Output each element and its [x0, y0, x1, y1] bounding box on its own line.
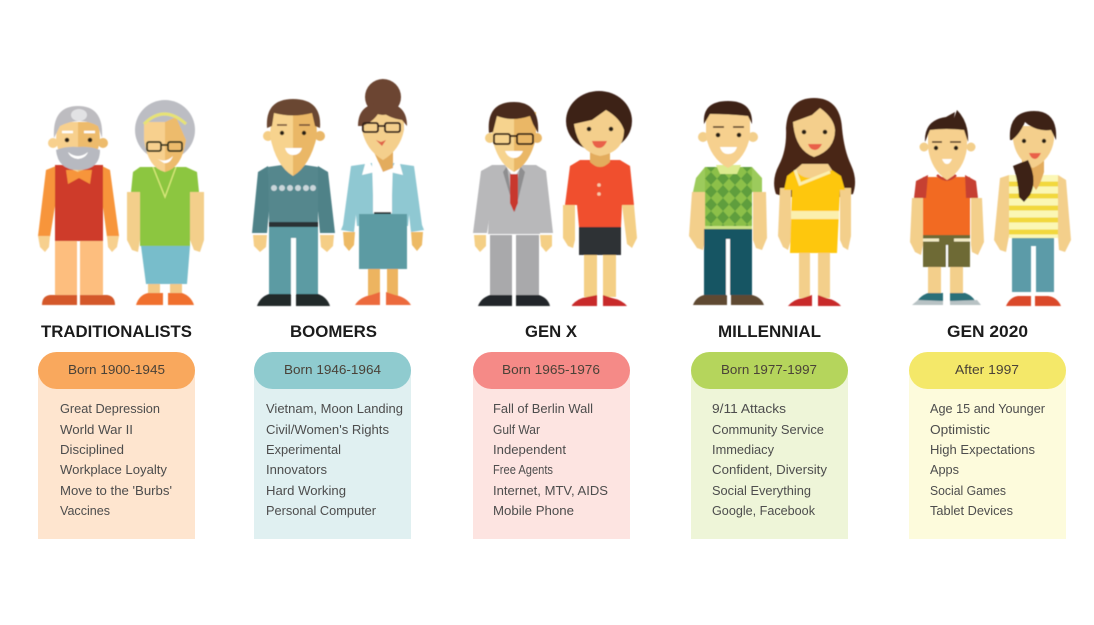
woman in blue jacket — [341, 79, 424, 305]
list: Workplace Loyalty — [60, 463, 168, 477]
man in grey suit — [473, 102, 553, 306]
heading: GEN X — [525, 322, 578, 341]
list: Confident, Diversity — [712, 463, 828, 477]
date pill — [691, 352, 848, 389]
heading: GEN 2020 — [947, 322, 1028, 341]
list: Age 15 and Younger — [930, 402, 1045, 416]
list: 9/11 Attacks — [712, 402, 786, 416]
pill label: Born 1900-1945 — [68, 363, 165, 377]
list: Internet, MTV, AIDS — [493, 484, 608, 498]
grandfather — [38, 106, 119, 305]
list: Fall of Berlin Wall — [493, 402, 593, 416]
column: traditionalists — [38, 322, 195, 539]
list — [493, 402, 608, 518]
list: High Expectations — [930, 443, 1035, 457]
figures: gen 2020 — [910, 110, 1071, 306]
list: Optimistic — [930, 423, 990, 437]
panel body — [473, 370, 630, 539]
figures: gen x — [473, 91, 637, 306]
woman in yellow dress — [774, 98, 855, 306]
list: Free Agents — [493, 463, 553, 477]
column: gen 2020 — [909, 322, 1066, 539]
date pill — [909, 352, 1066, 389]
panel body — [909, 370, 1066, 539]
pill label: Born 1946-1964 — [284, 363, 381, 377]
list: Gulf War — [493, 423, 540, 437]
list: Tablet Devices — [930, 504, 1013, 518]
list: Personal Computer — [266, 504, 376, 518]
figures: millennial — [689, 98, 855, 306]
list: Move to the 'Burbs' — [60, 484, 172, 498]
figures: boomers — [252, 79, 424, 306]
man in sweater — [252, 99, 335, 306]
heading: BOOMERS — [290, 322, 377, 341]
list: Independent — [493, 443, 567, 457]
list: Immediacy — [712, 443, 775, 457]
heading: TRADITIONALISTS — [41, 322, 192, 341]
man in argyle vest — [689, 101, 767, 305]
list: Vaccines — [60, 504, 110, 518]
boy — [910, 110, 984, 305]
list: Civil/Women's Rights — [266, 423, 389, 437]
list — [712, 402, 828, 518]
pill label: Born 1977-1997 — [721, 363, 817, 377]
column: gen x — [473, 322, 630, 539]
figures: traditionalists — [38, 100, 204, 305]
list: Hard Working — [266, 484, 346, 498]
column: boomers — [254, 322, 411, 539]
heading: MILLENNIAL — [718, 322, 821, 341]
woman in red blouse — [563, 91, 637, 306]
list: Google, Facebook — [712, 504, 816, 518]
grandmother — [127, 100, 204, 305]
list: Mobile Phone — [493, 504, 574, 518]
column: millennial — [691, 322, 848, 539]
list: Vietnam, Moon Landing — [266, 402, 403, 416]
list: Apps — [930, 463, 959, 477]
list — [266, 402, 403, 518]
date pill — [254, 352, 411, 389]
list: Community Service — [712, 423, 824, 437]
list — [60, 402, 172, 518]
list: Experimental — [266, 443, 341, 457]
list: World War II — [60, 423, 133, 437]
list: Great Depression — [60, 402, 160, 416]
panel body — [254, 370, 411, 539]
list: Innovators — [266, 463, 327, 477]
girl — [994, 111, 1071, 306]
panel body — [691, 370, 848, 539]
date pill — [38, 352, 195, 389]
date pill — [473, 352, 630, 389]
pill label: Born 1965-1976 — [502, 363, 600, 377]
panel body — [38, 370, 195, 539]
list — [930, 402, 1045, 518]
pill label: After 1997 — [955, 363, 1019, 377]
list: Social Everything — [712, 484, 811, 498]
list: Social Games — [930, 484, 1006, 498]
list: Disciplined — [60, 443, 124, 457]
